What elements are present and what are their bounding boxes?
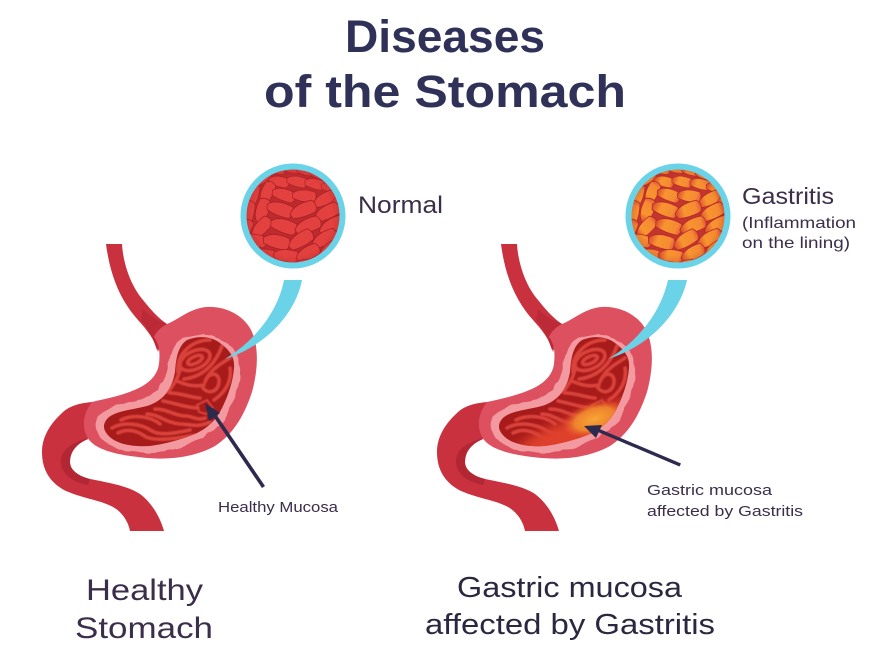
title: of the Stomach [264, 66, 626, 117]
caption: healthy stomach: Healthy [86, 574, 203, 607]
label: gastritis: Gastritis [742, 183, 834, 209]
label: gastritis [742, 183, 856, 252]
icon: gastritis lining magnifier [608, 161, 738, 359]
label: normal: Normal [358, 192, 443, 219]
caption: healthy stomach [75, 574, 213, 645]
caption: gastric mucosa affected [425, 572, 715, 641]
inflamed mucosa area [516, 396, 622, 446]
label: gastritis: (Inflammation [742, 215, 856, 232]
label: gastric mucosa callout: Gastric mucosa [647, 483, 773, 499]
healthy stomach illustration [42, 244, 257, 531]
label: gastric mucosa callout [647, 483, 803, 520]
title [264, 11, 626, 117]
icon: normal lining magnifier [225, 161, 353, 359]
caption: healthy stomach: Stomach [75, 612, 213, 645]
title: Diseases [345, 11, 545, 62]
caption: gastric mucosa affected: Gastric mucosa [457, 572, 683, 604]
label: gastric mucosa callout: affected by Gastritis [647, 504, 803, 520]
arrow: gastritis area [584, 425, 681, 466]
gastritis stomach illustration [437, 244, 652, 531]
label: healthy mucosa: Healthy Mucosa [218, 500, 339, 516]
caption: gastric mucosa affected: affected by Gastritis [425, 609, 715, 641]
arrow: healthy mucosa [205, 403, 265, 488]
label: gastritis: on the lining) [742, 235, 850, 252]
